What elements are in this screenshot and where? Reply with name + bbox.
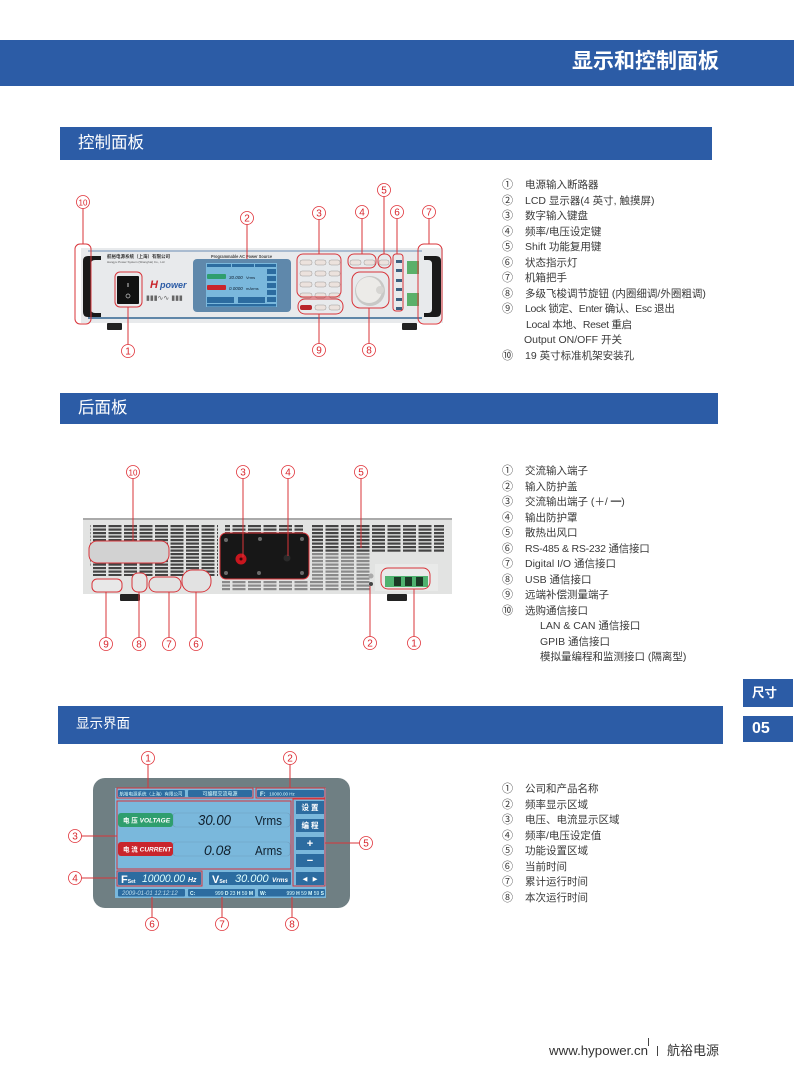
display number markers: 1 (145, 754, 151, 764)
function buttons: + (307, 838, 313, 850)
legend list: display interface: ⑦ (502, 876, 513, 888)
front number markers: 5 (381, 186, 387, 196)
front LCD: Vrms (246, 275, 255, 280)
legend list: rear panel: 散热出风口 (525, 527, 578, 539)
rear number markers (100, 466, 420, 650)
rear number markers: 7 (166, 640, 172, 650)
legend list: front panel: Local 本地、Reset 重启 (526, 318, 632, 330)
green certification marks (407, 261, 419, 306)
numeric keypad (300, 260, 340, 298)
legend list: display interface: 公司和产品名称 (525, 783, 598, 795)
legend list: rear panel: ④ (502, 512, 513, 524)
legend list: front panel: Lock 锁定、Enter 确认、Esc 退出 (525, 303, 674, 315)
voltage setting: 30.000 (235, 873, 270, 885)
legend list: front panel: ① (502, 179, 513, 191)
legend list: display interface: ③ (502, 814, 513, 826)
legend list: front panel: ④ (502, 226, 513, 238)
Hypower logo: H (150, 279, 159, 291)
legend list: rear panel: ② (502, 480, 513, 492)
display number markers (68, 752, 372, 930)
voltage row (118, 812, 290, 829)
legend list: front panel: ⑨ (502, 303, 513, 315)
rear number markers: 9 (103, 640, 109, 650)
rear number markers: 1 (411, 638, 417, 650)
status bar (118, 889, 325, 897)
knob (355, 276, 385, 306)
rear chassis (83, 518, 452, 594)
RS-485 port (182, 570, 211, 592)
front number markers: 7 (426, 208, 432, 218)
figure: display interface screen (68, 752, 372, 930)
optional comm cover (89, 541, 169, 563)
legend list: rear panel (502, 464, 686, 663)
footer: website and brand: 航裕电源 (667, 1043, 719, 1058)
display callout outlines and leaders (81, 764, 360, 918)
legend list: front panel (502, 178, 706, 362)
brand text: 航裕电源系统（上海）有限公司 (107, 253, 170, 260)
legend list: rear panel: 远端补偿测量端子 (525, 589, 609, 601)
legend list: rear panel: ⑥ (502, 542, 513, 554)
top info bars: 航裕电源系统（上海）有限公司 (120, 790, 182, 798)
digital IO port (149, 577, 181, 592)
voltage setting (209, 872, 291, 886)
status lights (396, 260, 402, 310)
legend list: rear panel: ① (502, 465, 513, 477)
section heading: rear panel (60, 393, 718, 424)
legend list: front panel: ③ (502, 210, 513, 222)
rear callout leaders (106, 478, 414, 638)
legend list: front panel: 机箱把手 (525, 272, 567, 284)
current row: 电 流 CURRENT (123, 844, 172, 854)
legend list: rear panel: ⑧ (502, 574, 513, 586)
figure: rear panel device (83, 466, 452, 650)
left handle (83, 256, 101, 317)
voltage row: 电 压 VOLTAGE (123, 816, 171, 824)
front number markers (76, 184, 436, 358)
legend list: rear panel: ③ (502, 496, 513, 508)
function keys (300, 305, 340, 310)
top info bars: 10000.00 Hz (269, 792, 296, 796)
legend list: rear panel: LAN & CAN 通信接口 (540, 620, 640, 632)
legend list: rear panel: 输入防护盖 (525, 480, 578, 492)
current row: 0.08 (204, 842, 231, 858)
legend list: display interface: 当前时间 (525, 860, 567, 872)
Hypower logo: power (159, 280, 187, 290)
status bar: 999 D 23 H 59 M (215, 891, 253, 897)
frequency setting (118, 872, 201, 886)
front number markers: 2 (244, 214, 250, 224)
section heading: control panel: 控制面板 (78, 134, 144, 152)
display number markers: 3 (72, 832, 78, 842)
legend list: display interface: ⑤ (502, 845, 513, 857)
Hypower logo (146, 279, 187, 302)
front number markers: 6 (394, 208, 400, 218)
side tab: dimensions (743, 679, 793, 707)
right handle (424, 256, 441, 317)
frequency setting: Hz (188, 877, 197, 884)
legend list: front panel: 多级飞梭调节旋钮 (内圈细调/外圈粗调) (525, 288, 706, 300)
Hypower logo: ▮▮▮∿∿ ▮▮▮ (146, 295, 183, 302)
function buttons: − (307, 855, 313, 867)
legend list: rear panel: 输出防护罩 (525, 512, 578, 524)
display number markers: 5 (363, 838, 369, 850)
remote sense terminal (92, 579, 122, 592)
legend list: display interface: ⑧ (502, 892, 513, 904)
rear number markers: 8 (136, 640, 142, 650)
legend list: rear panel: ⑨ (502, 589, 513, 601)
status bar: W: (260, 891, 267, 897)
input protective cover screw (368, 574, 374, 586)
figure: front panel device: Hangyu Power System (Shanghai) Co., Ltd (107, 260, 165, 264)
header bar: page title (0, 40, 794, 86)
section heading: rear panel: 后面板 (78, 399, 128, 417)
legend list: rear panel: 选购通信接口 (525, 604, 588, 616)
front callout outlines and leaders (75, 196, 442, 345)
feet (107, 323, 417, 330)
front number markers: 10 (79, 198, 88, 208)
legend list: display interface: ④ (502, 830, 513, 842)
front LCD: mArms (246, 286, 259, 291)
front LCD (193, 259, 291, 312)
section heading: display interface (58, 706, 723, 744)
front LCD: 30.000 (229, 275, 243, 280)
frequency and voltage keys (350, 260, 389, 265)
front number markers: 9 (316, 346, 322, 356)
voltage row: Vrms (255, 813, 282, 828)
frequency setting: FSet (121, 874, 136, 886)
AC input terminal (375, 564, 438, 591)
legend list: display interface: 电压、电流显示区域 (525, 814, 620, 826)
rear number markers: 10 (129, 468, 138, 478)
display number markers: 4 (72, 874, 78, 884)
legend list: display interface: 频率显示区域 (525, 798, 588, 810)
rear number markers: 6 (193, 640, 199, 650)
legend list: front panel: LCD 显示器(4 英寸, 触摸屏) (525, 194, 655, 206)
side tab: dimensions: 尺寸 (752, 686, 777, 700)
vents (90, 524, 444, 591)
legend list: display interface: ② (502, 798, 513, 810)
USB port (132, 573, 147, 592)
rear number markers: 4 (285, 468, 291, 478)
legend list: front panel: 电源输入断路器 (525, 179, 598, 191)
rear number markers: 2 (367, 638, 373, 650)
legend list: front panel: ⑦ (502, 272, 513, 284)
voltage setting: Vrms (272, 877, 289, 884)
power switch (117, 276, 139, 304)
legend list: front panel: ⑤ (502, 241, 513, 253)
legend list: display interface: 功能设置区域 (525, 845, 588, 857)
legend list: rear panel: ⑦ (502, 558, 513, 570)
legend list: front panel: ② (502, 194, 513, 206)
side tab: page number (743, 716, 793, 742)
rear number markers: 3 (240, 468, 246, 478)
top info bars: 可编程交流电源 (202, 790, 238, 798)
legend list: display interface (502, 782, 620, 904)
rear feet (120, 594, 407, 601)
display number markers: 7 (219, 920, 225, 930)
legend list: rear panel: Digital I/O 通信接口 (525, 558, 616, 570)
function buttons: ◄ ► (301, 874, 319, 884)
legend list: display interface: 本次运行时间 (525, 892, 588, 904)
legend list: display interface: 频率/电压设定值 (525, 830, 601, 842)
section heading: control panel (60, 127, 712, 160)
front number markers: 1 (125, 346, 131, 358)
top info bars (118, 790, 324, 798)
output cover (220, 533, 309, 579)
function buttons (296, 801, 324, 885)
status bar: C: (190, 891, 196, 897)
legend list: display interface: ⑥ (502, 860, 513, 872)
voltage row: 30.00 (198, 812, 232, 829)
current row (118, 842, 290, 858)
front model heading: Programmable AC Power Source (211, 254, 272, 259)
legend list: rear panel: ⑤ (502, 527, 513, 539)
front LCD: 0.0000 (229, 286, 243, 291)
current row: Arms (255, 843, 282, 858)
legend list: front panel: 状态指示灯 (525, 256, 578, 268)
legend list: rear panel: USB 通信接口 (525, 574, 592, 586)
status bar: 999 H 59 M 59 S (286, 891, 325, 897)
legend list: front panel: 数字输入键盘 (525, 210, 588, 222)
display number markers: 8 (289, 920, 295, 930)
section heading: display interface: 显示界面 (76, 716, 130, 731)
front number markers: 8 (366, 346, 372, 356)
legend list: rear panel: ⑩ (502, 604, 513, 616)
legend list: rear panel: RS-485 & RS-232 通信接口 (525, 542, 650, 554)
legend list: rear panel: 交流输出端子 (＋/ ━) (525, 496, 625, 508)
front number markers: 4 (359, 208, 365, 218)
side tab: page number: 05 (752, 720, 770, 737)
display number markers: 6 (149, 920, 155, 930)
front chassis (81, 248, 443, 323)
legend list: rear panel: 交流输入端子 (525, 465, 588, 477)
footer: website and brand: www.hypower.cn (549, 1043, 648, 1058)
header bar: page title: 显示和控制面板 (572, 50, 719, 73)
legend list: display interface: 累计运行时间 (525, 876, 588, 888)
rear number markers: 5 (358, 468, 364, 478)
legend list: front panel: Shift 功能复用键 (525, 241, 601, 253)
legend list: front panel: ⑧ (502, 288, 513, 300)
function buttons: 设 置 (301, 802, 319, 812)
blue screen (115, 788, 326, 898)
status bar: 2009-01-01 12:12:12 (121, 891, 178, 897)
legend list: rear panel: GPIB 通信接口 (540, 636, 610, 648)
display number markers: 2 (287, 754, 293, 764)
figure: front panel device (75, 184, 443, 358)
legend list: display interface: ① (502, 783, 513, 795)
front number markers: 3 (316, 208, 322, 220)
legend list: front panel: 19 英寸标准机架安装孔 (525, 350, 634, 362)
function buttons: 编 程 (301, 820, 319, 830)
legend list: front panel: ⑩ (502, 350, 513, 362)
voltage setting: VSet (212, 874, 227, 886)
footer: website and brand (549, 1038, 719, 1058)
gray bezel (93, 778, 350, 908)
legend list: rear panel: 模拟量编程和监测接口 (隔离型) (540, 651, 686, 663)
top info bars: F: (260, 792, 266, 798)
legend list: front panel: ⑥ (502, 256, 513, 268)
legend list: front panel: 频率/电压设定键 (525, 226, 601, 238)
frequency setting: 10000.00 (142, 873, 186, 885)
legend list: front panel: Output ON/OFF 开关 (524, 334, 622, 346)
